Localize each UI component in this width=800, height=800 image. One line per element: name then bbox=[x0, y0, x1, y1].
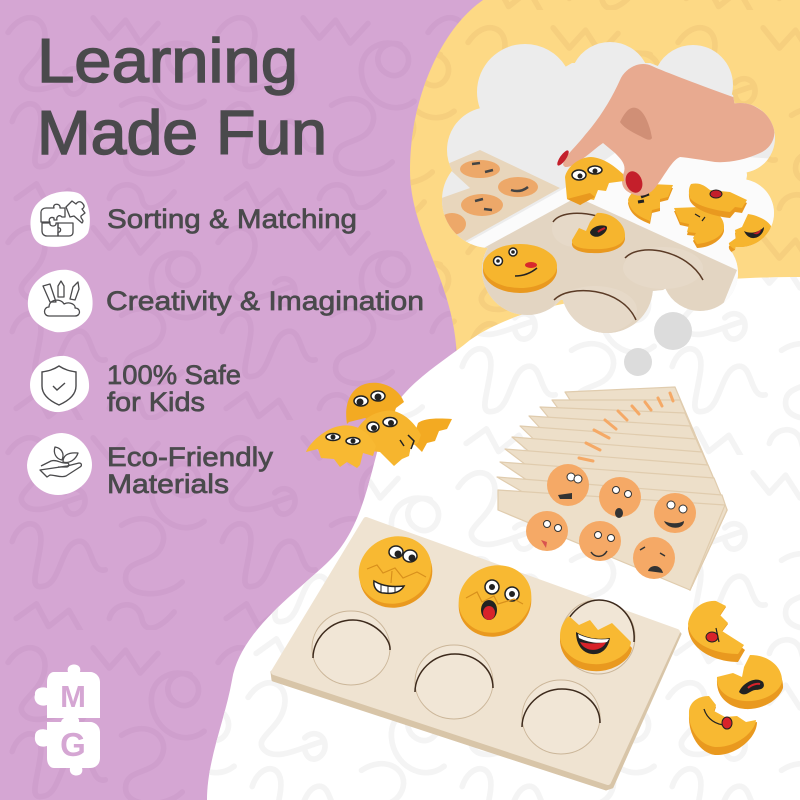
title: Learning bbox=[37, 27, 298, 96]
hand bbox=[563, 64, 774, 196]
feature: safe for kids bbox=[30, 356, 241, 417]
wooden board bbox=[482, 200, 737, 333]
egg 3: partial piece with laughing mouth bbox=[560, 616, 632, 671]
fan of picture cards bbox=[497, 387, 727, 590]
label: Creativity & Imagination bbox=[106, 286, 424, 316]
board top bbox=[274, 520, 677, 782]
loose egg piece: crying bbox=[674, 207, 724, 248]
thought bubble: small grey circle bbox=[624, 348, 652, 376]
red nails bbox=[557, 150, 642, 193]
loose egg piece: red mouth bbox=[689, 183, 747, 218]
piece with open mouth on board bbox=[572, 213, 625, 253]
loose egg pieces cluster bbox=[306, 383, 452, 468]
logo: MG puzzle mark: G bbox=[60, 726, 86, 763]
held egg piece bbox=[565, 157, 624, 205]
label: Sorting & Matching bbox=[107, 204, 357, 234]
background: yellow panel bbox=[410, 0, 800, 360]
label: Materials bbox=[107, 469, 229, 499]
empty hole left bbox=[312, 611, 390, 685]
background: white panel bbox=[207, 277, 800, 800]
icon: puzzle pieces bbox=[30, 191, 90, 247]
feature: eco-friendly materials bbox=[27, 433, 274, 499]
egg 2: surprised face bbox=[448, 553, 542, 649]
middle piece: frown bbox=[717, 655, 783, 709]
empty hole right bbox=[522, 680, 600, 754]
icon: art tools on cloud bbox=[28, 270, 93, 332]
picture cards on table bbox=[436, 150, 560, 243]
bottom piece: licking tongue bbox=[689, 696, 757, 755]
feature: creativity and imagination bbox=[28, 270, 424, 332]
top piece: tongue bbox=[688, 601, 745, 662]
label bbox=[107, 442, 274, 499]
feature: sorting and matching bbox=[30, 191, 357, 247]
loose egg piece: laughing bbox=[729, 214, 773, 256]
icon: hand holding plant bbox=[27, 433, 92, 495]
title bbox=[37, 27, 327, 168]
label: Eco-Friendly bbox=[107, 442, 274, 472]
photo: hand playing with puzzle in cloud shape bbox=[442, 42, 775, 333]
label bbox=[107, 360, 241, 417]
orange edge marks on back cards bbox=[579, 393, 673, 461]
wooden puzzle board bbox=[272, 520, 680, 789]
egg 1: grinning face bbox=[348, 524, 443, 620]
yellow doodle pattern bbox=[410, 0, 800, 360]
label: for Kids bbox=[107, 387, 205, 417]
hand shadow bbox=[620, 108, 652, 140]
logo: MG puzzle mark bbox=[34, 664, 100, 776]
card egg faces bbox=[526, 464, 696, 579]
loose egg pieces right bbox=[688, 601, 783, 755]
empty hole middle bbox=[415, 645, 493, 719]
logo: MG puzzle mark: M bbox=[60, 679, 86, 714]
board thickness bbox=[272, 632, 680, 789]
label: 100% Safe bbox=[107, 360, 241, 390]
egg piece with happy face on board bbox=[483, 244, 557, 293]
loose egg piece: eyes bbox=[628, 184, 673, 224]
title: Made Fun bbox=[37, 99, 327, 168]
hole with partial piece bbox=[561, 600, 635, 674]
icon: shield with check bbox=[30, 356, 89, 412]
thought bubble: large grey circle bbox=[654, 312, 692, 350]
